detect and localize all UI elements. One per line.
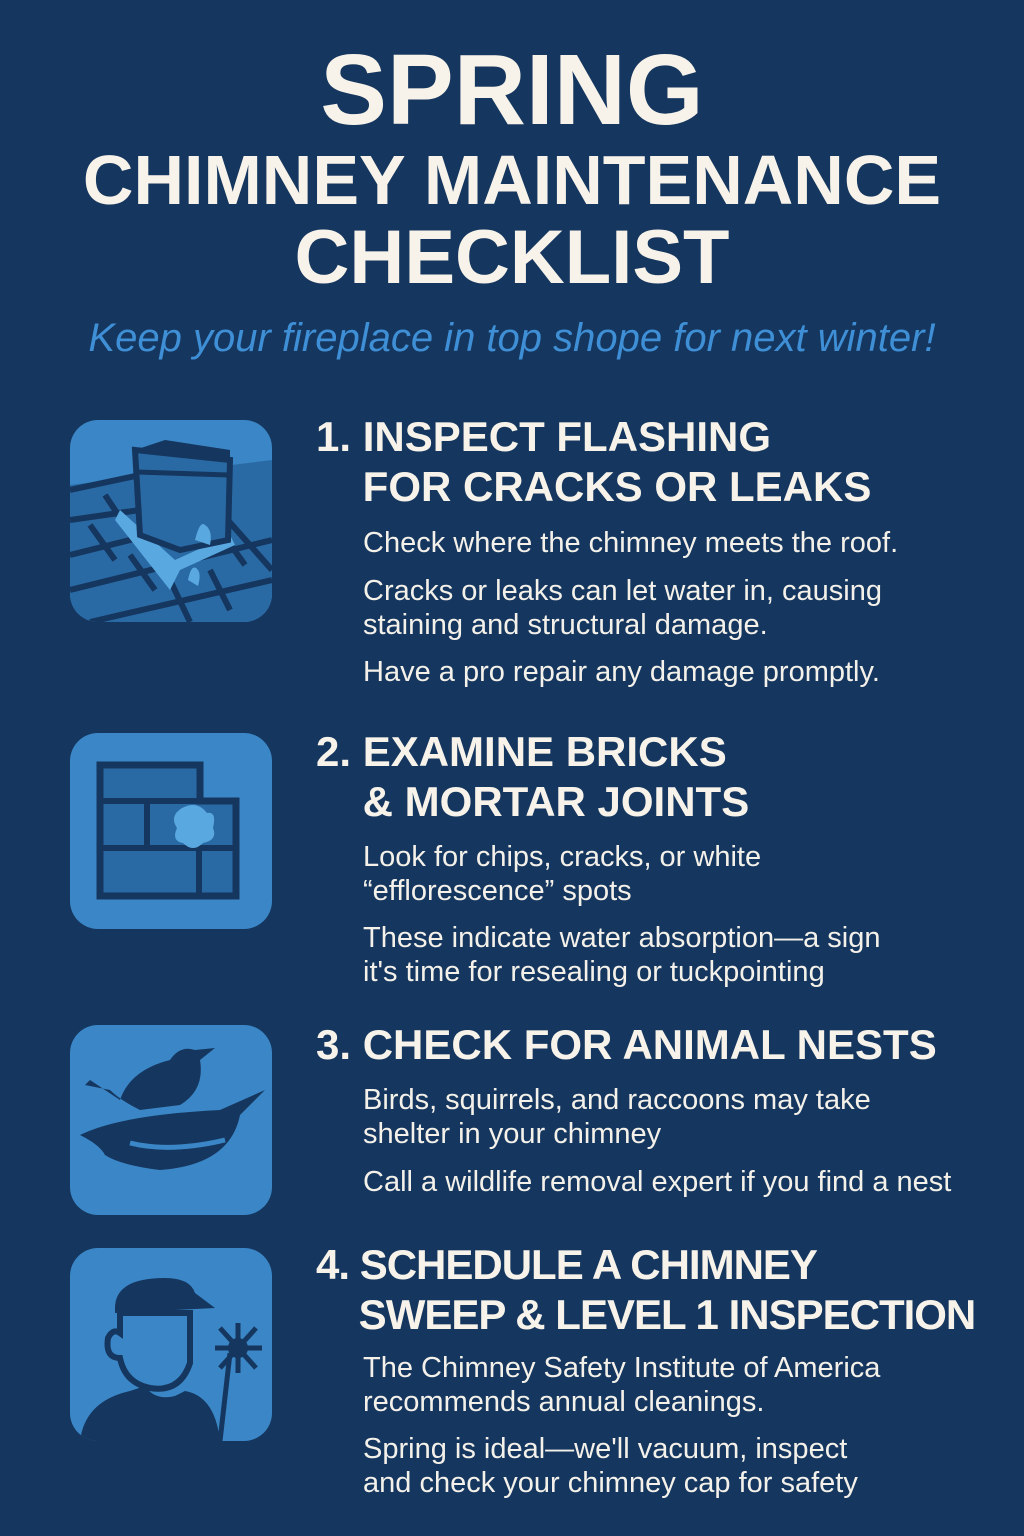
heading 3: 3. CHECK FOR ANIMAL NESTS: [316, 1021, 937, 1068]
body 2b: it's time for resealing or tuckpointing: [363, 956, 825, 988]
title line 3: CHECKLIST: [295, 215, 729, 300]
body 4: [363, 1352, 880, 1418]
heading 1: 1. INSPECT FLASHING: [316, 413, 771, 460]
title line 2: CHIMNEY MAINTENANCE: [83, 141, 941, 219]
heading 4: 4. SCHEDULE A CHIMNEY: [316, 1241, 817, 1288]
body 1: Check where the chimney meets the roof.: [363, 527, 898, 559]
body 1b: staining and structural damage.: [363, 609, 768, 641]
heading 1: FOR CRACKS OR LEAKS: [363, 463, 871, 510]
icon: bird nest: [70, 1025, 272, 1215]
icon: roof flashing: [70, 420, 272, 622]
heading 2: 2. EXAMINE BRICKS: [316, 728, 727, 775]
body 2: “efflorescence” spots: [363, 875, 632, 907]
heading 2: & MORTAR JOINTS: [363, 778, 749, 825]
body 1b: Cracks or leaks can let water in, causing: [363, 575, 882, 607]
body 2b: [363, 922, 880, 988]
heading 2: [316, 728, 749, 825]
subtitle: Keep your fireplace in top shope for next winter!: [88, 316, 936, 360]
heading 4: [316, 1241, 975, 1338]
title: SPRING: [320, 34, 704, 146]
body 2: Look for chips, cracks, or white: [363, 841, 761, 873]
body 3: [363, 1084, 871, 1150]
icon: chimney sweep: [70, 1248, 272, 1441]
body 4b: Spring is ideal—we'll vacuum, inspect: [363, 1433, 847, 1465]
body 1c: Have a pro repair any damage promptly.: [363, 656, 880, 688]
body 3b: Call a wildlife removal expert if you find a nest: [363, 1166, 951, 1198]
heading 4: SWEEP & LEVEL 1 INSPECTION: [359, 1291, 975, 1338]
heading 1: [316, 413, 871, 510]
body 4b: [363, 1433, 858, 1499]
body 1b: [363, 575, 882, 641]
body 3: Birds, squirrels, and raccoons may take: [363, 1084, 871, 1116]
icon: bricks: [70, 733, 272, 929]
body 4b: and check your chimney cap for safety: [363, 1467, 858, 1499]
body 2b: These indicate water absorption—a sign: [363, 922, 880, 954]
body 2: [363, 841, 761, 907]
body 4: The Chimney Safety Institute of America: [363, 1352, 880, 1384]
body 3: shelter in your chimney: [363, 1118, 661, 1150]
body 4: recommends annual cleanings.: [363, 1386, 764, 1418]
